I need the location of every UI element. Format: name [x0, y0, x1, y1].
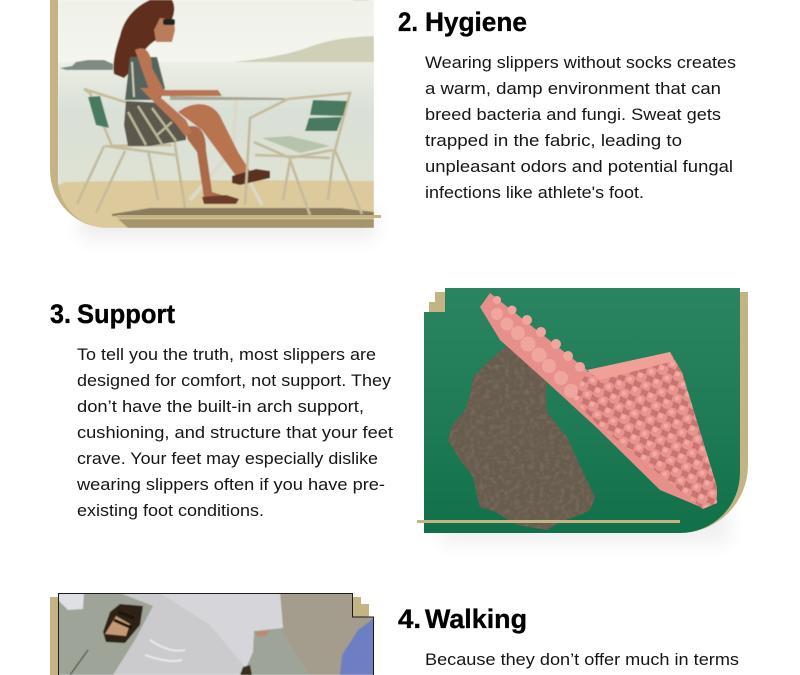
text block: hygiene: a warm, damp environment that can	[425, 79, 721, 98]
text block: hygiene	[425, 53, 736, 202]
text block: support: designed for comfort, not support. They	[77, 371, 392, 390]
lower leg	[186, 126, 222, 198]
heading: 2. Hygiene: Hygiene	[425, 7, 527, 37]
sandals	[232, 169, 270, 185]
text block: hygiene: trapped in the fabric, leading to	[425, 131, 682, 150]
arms	[135, 48, 222, 96]
text block: support: cushioning, and structure that your feet	[77, 423, 393, 442]
dress skirt	[124, 101, 186, 146]
text block: hygiene: unpleasant odors and potential fungal	[425, 157, 733, 176]
photo: person in white trousers and sandals	[58, 593, 374, 675]
blue sleeve	[340, 618, 374, 675]
left chair	[77, 89, 185, 213]
white garment	[113, 593, 283, 675]
slipper upper	[572, 352, 717, 509]
text block: support: wearing slippers often if you have pre-	[76, 475, 385, 494]
slipper sole	[480, 293, 703, 508]
right chair	[245, 93, 362, 215]
text block: support	[76, 345, 393, 520]
text block: walking: Because they don’t offer much in terms	[425, 650, 739, 669]
text block: hygiene: Wearing slippers without socks creates	[425, 53, 736, 72]
woman	[113, 0, 270, 204]
text block: support: don’t have the built-in arch support,	[77, 397, 364, 416]
crossed leg	[178, 104, 250, 176]
heading: 4. Walking: 4.	[398, 604, 421, 634]
panel: hygiene photo	[50, 0, 381, 239]
table	[170, 96, 285, 205]
sandal	[103, 604, 143, 643]
photo: pink beaded slipper on a rock	[424, 288, 740, 533]
heading: 4. Walking: Walking	[425, 604, 527, 634]
text block: support: existing foot conditions.	[77, 501, 264, 520]
panel: support photo	[417, 288, 748, 543]
heading: 3. Support: Support	[77, 299, 175, 329]
text block: support: crave. Your feet may especially dislike	[77, 449, 378, 468]
text block: hygiene: breed bacteria and fungi. Sweat gets	[425, 105, 721, 124]
heading: 2. Hygiene: 2.	[398, 7, 418, 37]
rock	[448, 345, 595, 530]
photo: woman at a beach table	[58, 0, 374, 228]
text block: hygiene: infections like athlete's foot.	[425, 183, 644, 202]
heading: 3. Support: 3.	[50, 299, 71, 329]
photo outline	[58, 594, 374, 675]
text block: support: To tell you the truth, most slippers are	[77, 345, 376, 364]
panel: walking photo	[50, 593, 374, 675]
